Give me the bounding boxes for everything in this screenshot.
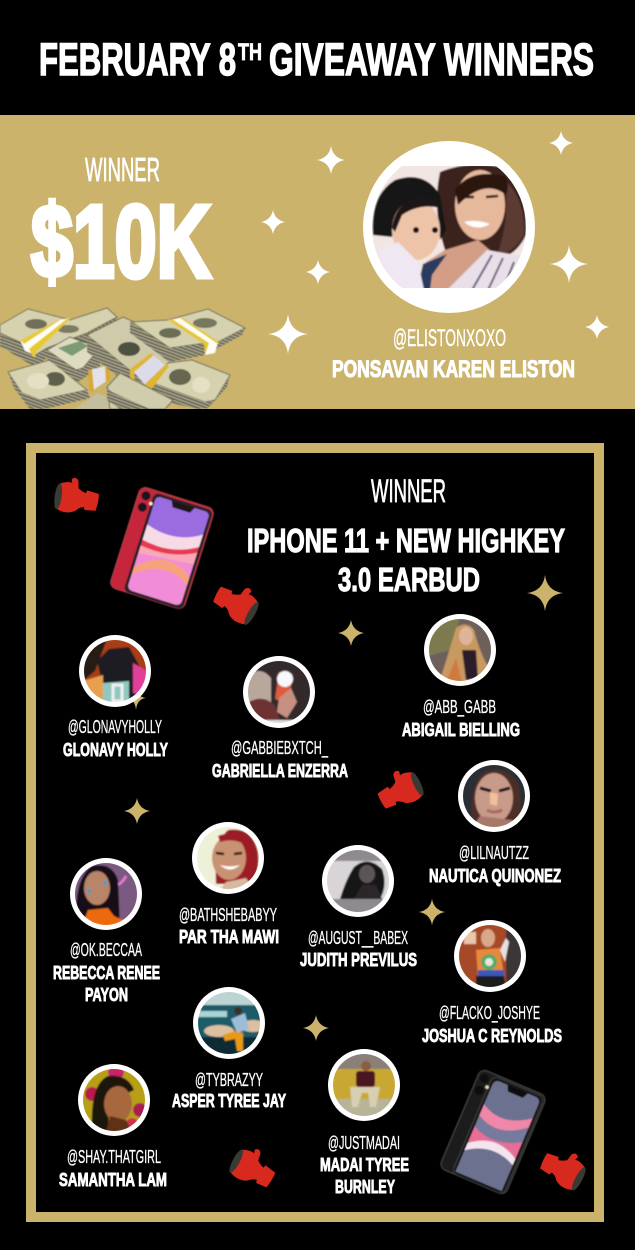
winner: Gabriella Enzerra bbox=[212, 656, 348, 781]
avatar bbox=[328, 1049, 400, 1121]
handle: @TYBRAZYY bbox=[195, 1070, 263, 1090]
icon: gold sparkle bbox=[303, 1015, 329, 1041]
winner: Madai Tyree Burnley bbox=[320, 1049, 409, 1197]
handle: @FLACKO_JOSHYE bbox=[439, 1003, 540, 1024]
avatar bbox=[424, 614, 496, 686]
handle: @ABB_GABB bbox=[423, 697, 496, 718]
name: REBECCA RENEE bbox=[53, 963, 160, 983]
icon: red earbud bbox=[536, 1142, 592, 1194]
title bbox=[39, 34, 594, 85]
icon: red iphone bbox=[109, 486, 215, 610]
panel heading: iphone prize: WINNER bbox=[371, 473, 446, 509]
icon: gold sparkle bbox=[338, 620, 364, 646]
icon: sparkle bbox=[261, 210, 285, 234]
handle: @LILNAUTZZ bbox=[459, 843, 529, 863]
panel: grand prize winner bbox=[0, 115, 635, 409]
name: JUDITH PREVILUS bbox=[300, 950, 417, 970]
name: JOSHUA C REYNOLDS bbox=[422, 1026, 562, 1046]
avatar bbox=[454, 920, 526, 992]
handle: @SHAY.THATGIRL bbox=[67, 1147, 161, 1167]
icon: red earbud bbox=[372, 764, 427, 814]
winner: Rebecca Renee Payon bbox=[53, 858, 160, 1005]
winner: Par Tha Mawi bbox=[179, 822, 279, 947]
name: GABRIELLA ENZERRA bbox=[212, 761, 348, 781]
icon: gold sparkle bbox=[527, 575, 563, 611]
icon: sparkle bbox=[549, 131, 573, 155]
icon: sparkle bbox=[585, 315, 609, 339]
name: GLONAVY HOLLY bbox=[63, 740, 168, 760]
panel heading: iphone prize: 3.0 EARBUD bbox=[338, 561, 480, 598]
avatar bbox=[192, 822, 264, 894]
icon: red earbud bbox=[209, 575, 265, 628]
icon: sparkle bbox=[550, 245, 588, 283]
winner: Samantha Lam bbox=[59, 1064, 167, 1190]
winner photo bbox=[363, 141, 535, 313]
handle: @JUSTMADAI bbox=[328, 1133, 400, 1153]
icon: sparkle bbox=[268, 314, 308, 354]
avatar bbox=[243, 656, 315, 728]
prize label: WINNER bbox=[85, 151, 160, 188]
icon: sparkle bbox=[317, 146, 345, 174]
avatar bbox=[70, 858, 142, 930]
winner: Abigail Bielling bbox=[402, 614, 520, 740]
winner: Rebecca Renee Payon: PAYON bbox=[85, 985, 128, 1005]
title: TH bbox=[238, 39, 262, 66]
winner: Madai Tyree Burnley: BURNLEY bbox=[335, 1177, 395, 1197]
winner: Joshua C Reynolds bbox=[422, 920, 562, 1046]
icon: red earbud bbox=[53, 475, 101, 517]
name: ABIGAIL BIELLING bbox=[402, 720, 520, 740]
icon: sparkle bbox=[306, 260, 330, 284]
name: PAR THA MAWI bbox=[179, 927, 279, 947]
icon: money stacks bbox=[0, 308, 245, 409]
handle: @GLONAVYHOLLY bbox=[68, 717, 162, 737]
name: SAMANTHA LAM bbox=[59, 1170, 167, 1190]
icon: gold sparkle bbox=[126, 688, 146, 710]
handle: @OK.BECCAA bbox=[70, 940, 142, 960]
avatar bbox=[322, 845, 394, 917]
handle: @AUGUST__BABEX bbox=[308, 928, 408, 949]
handle: @GABBIEBXTCH_ bbox=[231, 738, 329, 759]
name: ASPER TYREE JAY bbox=[172, 1091, 286, 1111]
icon: gold sparkle bbox=[124, 798, 150, 824]
winner: Judith Previlus bbox=[300, 845, 417, 970]
handle: @BATHSHEBABYY bbox=[179, 905, 277, 925]
prize amount: $10K bbox=[31, 184, 211, 299]
panel: iphone and earbud winners frame bbox=[31, 448, 599, 1217]
winner: Glonavy Holly bbox=[63, 635, 168, 760]
icon: black iphone bbox=[439, 1068, 547, 1196]
panel heading: iphone prize bbox=[247, 473, 565, 598]
name: NAUTICA QUINONEZ bbox=[429, 866, 561, 886]
icon: gold sparkle bbox=[419, 899, 445, 925]
winner: Nautica Quinonez bbox=[429, 760, 561, 886]
winner handle: @ELISTONXOXO bbox=[393, 325, 506, 352]
winner: Asper Tyree Jay bbox=[172, 987, 286, 1111]
avatar bbox=[79, 635, 151, 707]
avatar bbox=[458, 760, 530, 832]
name: MADAI TYREE bbox=[320, 1155, 409, 1175]
avatar bbox=[193, 987, 266, 1059]
avatar bbox=[78, 1064, 150, 1136]
icon: red earbud bbox=[226, 1141, 282, 1193]
title: FEBRUARY 8 bbox=[39, 34, 236, 85]
